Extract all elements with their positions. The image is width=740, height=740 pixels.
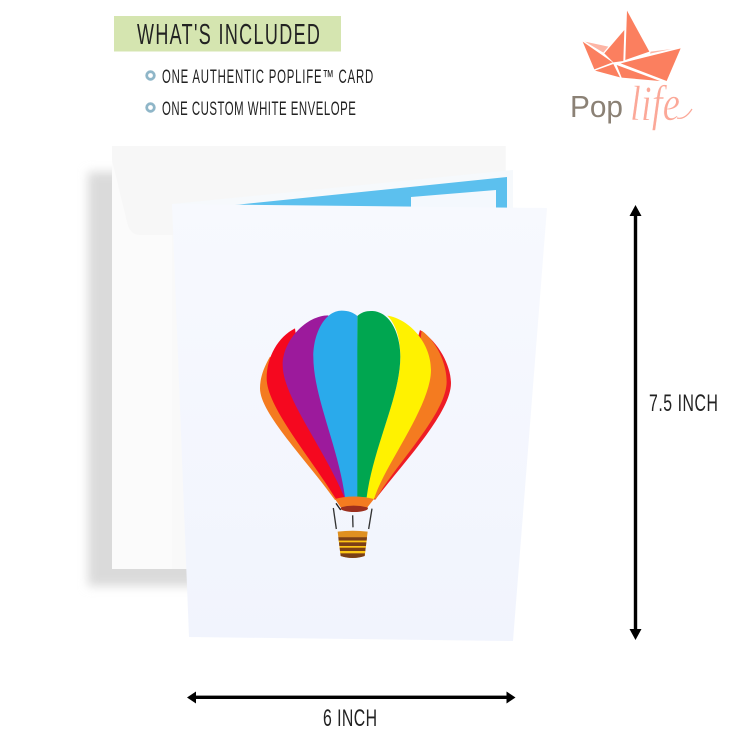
greeting card front bbox=[172, 204, 547, 641]
logo word: pop: Pop bbox=[570, 89, 623, 124]
list: included items bbox=[147, 67, 373, 120]
logo swash bbox=[677, 109, 692, 118]
label: 6 inch: 6 INCH bbox=[323, 706, 377, 732]
balloon skirt bbox=[335, 496, 374, 512]
basket bbox=[338, 531, 368, 558]
ropes bbox=[333, 508, 372, 529]
envelope inner strip bbox=[112, 160, 172, 569]
arrow: width dimension bbox=[187, 692, 516, 704]
envelope bbox=[112, 146, 506, 569]
insert card: blue back bbox=[172, 170, 513, 210]
list item: card: ONE AUTHENTIC POPLIFE™ CARD bbox=[162, 67, 373, 88]
arrow: height dimension bbox=[630, 205, 642, 640]
balloon envelope bbox=[260, 311, 451, 500]
heading: what's included: WHAT'S INCLUDED bbox=[137, 19, 320, 51]
envelope shadow bbox=[88, 172, 198, 586]
icon: origami boat bbox=[583, 11, 681, 81]
label: 7.5 inch: 7.5 INCH bbox=[649, 391, 718, 417]
envelope flap bbox=[112, 146, 505, 235]
logo: poplife bbox=[570, 11, 692, 131]
illustration: rainbow hot air balloon bbox=[260, 311, 451, 558]
logo word: life: life bbox=[630, 75, 680, 131]
list item: envelope: ONE CUSTOM WHITE ENVELOPE bbox=[162, 99, 356, 120]
